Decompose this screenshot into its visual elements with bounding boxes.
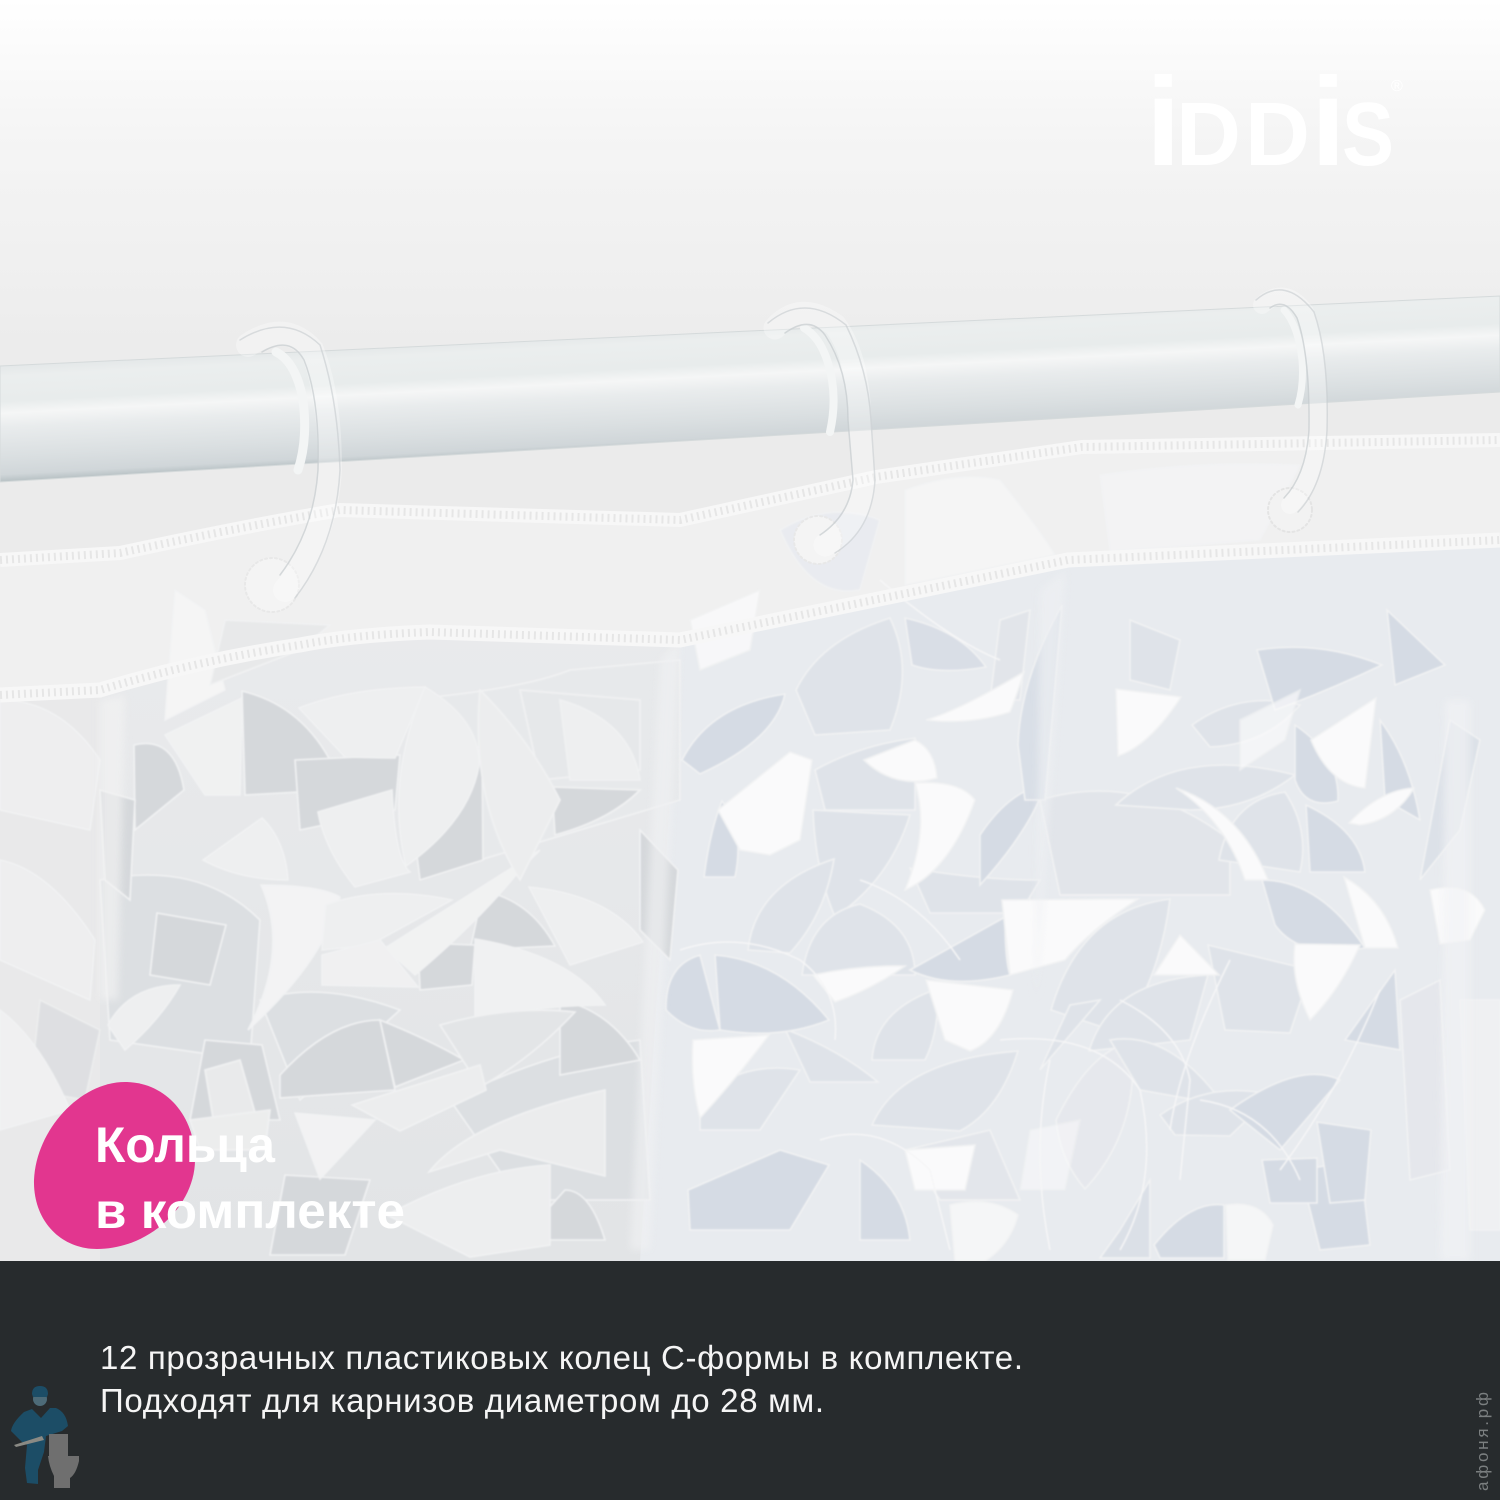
logo: IDDIS (1146, 53, 1403, 192)
right panel tint (640, 540, 1500, 1261)
footer band (0, 1261, 1500, 1500)
ring 3 (1256, 290, 1327, 532)
wall area below rod (0, 392, 1500, 600)
ring 2 (768, 308, 875, 564)
band leaves (165, 464, 1300, 720)
right panel bright patches (690, 590, 1485, 1261)
curtain (0, 392, 1500, 1261)
left panel dark patches (30, 691, 678, 1255)
left panel light leaves (0, 687, 643, 1257)
logo: IDDIS: i (1311, 53, 1346, 192)
description text: 12 прозрачных пластиковых колец С-формы в комплекте. (100, 1339, 1023, 1376)
top hem stitching (0, 440, 1500, 560)
logo: IDDIS: S (1342, 85, 1394, 185)
heading (95, 1117, 405, 1239)
heading: в комплекте (95, 1183, 405, 1239)
leaf pattern (0, 464, 1500, 1261)
description text: Подходят для карнизов диаметром до 28 мм. (100, 1382, 824, 1419)
fold highlights (100, 570, 1470, 1261)
pink blob (34, 1082, 195, 1249)
background wall (0, 0, 1500, 600)
curtain rings (240, 290, 1327, 612)
right panel blue patches (666, 605, 1480, 1258)
right panel mid-tone leaves (700, 618, 1500, 1230)
watermark: афоня.рф (1473, 1392, 1492, 1491)
logo: IDDIS: D (1176, 85, 1241, 185)
curtain base (0, 440, 1500, 1261)
left panel mid-tone leaves (100, 660, 680, 1200)
description text (100, 1339, 1023, 1419)
faint outline-only leaves (680, 580, 1380, 1250)
logo: IDDIS: D (1245, 85, 1310, 185)
logo: IDDIS: i (1146, 53, 1181, 192)
left edge panel (0, 690, 100, 1261)
logo: IDDIS: ® (1391, 78, 1403, 95)
lower hem stitching (0, 540, 1500, 695)
curtain rod (0, 296, 1500, 482)
icon: plumber with toilet (11, 1386, 79, 1488)
heading: Кольца (95, 1117, 276, 1173)
band between hems (0, 440, 1500, 695)
ring 1 (240, 327, 340, 612)
